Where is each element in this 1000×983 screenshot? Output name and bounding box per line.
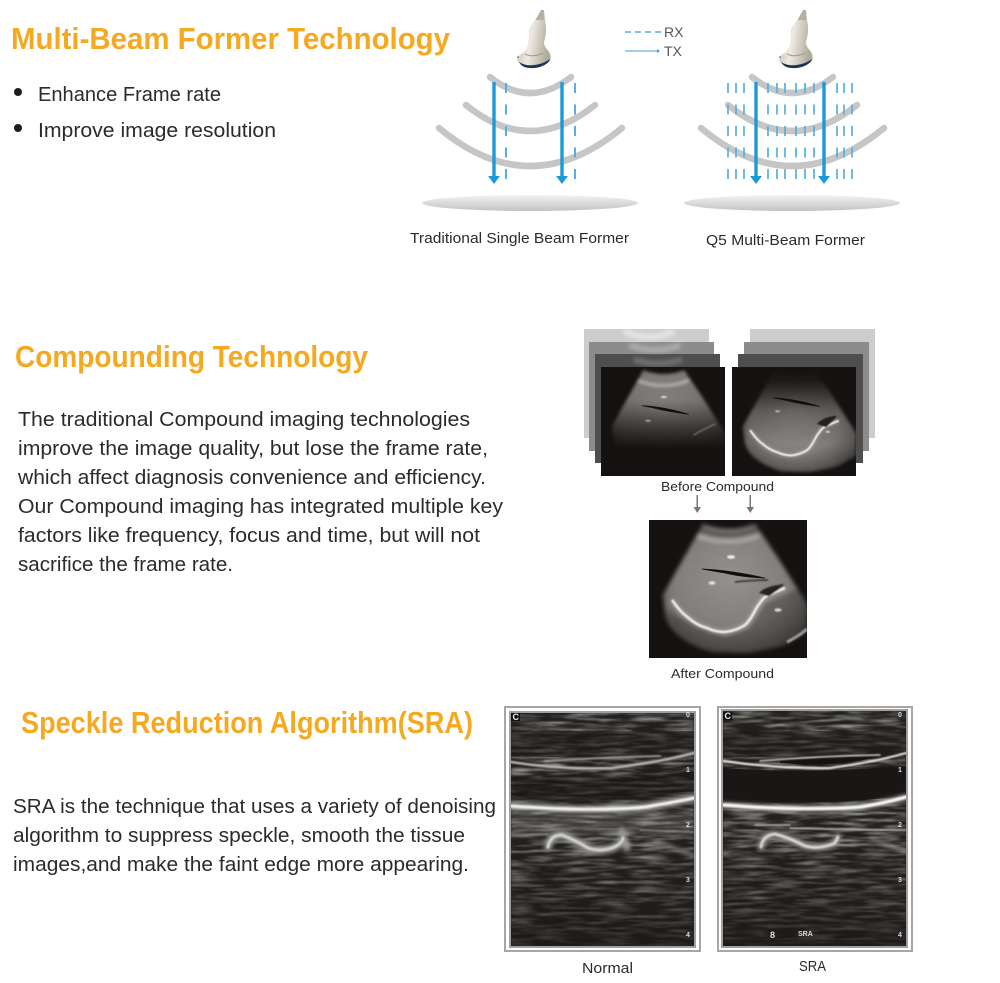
- scan markers: SRA: [798, 931, 813, 938]
- darker tissue below diaphragm: [664, 589, 807, 653]
- image: after compound: [649, 520, 811, 660]
- text block: SRA description: images,and make the faint edge more appearing.: [13, 854, 469, 876]
- bullet list: multi-beam benefits: [14, 84, 276, 142]
- caption: before compound: Before Compound: [661, 479, 774, 494]
- gray wave arcs: [701, 77, 884, 166]
- panel: normal ultrasound image: [505, 707, 700, 951]
- panel: SRA ultrasound image: [718, 707, 912, 951]
- scan markers: [511, 712, 690, 939]
- arrows: before to after: [694, 495, 754, 513]
- TX arrows: [750, 82, 830, 184]
- caption: after compound: After Compound: [671, 666, 774, 681]
- legend: RX and TX: RX: [664, 24, 684, 40]
- text block: compounding description: sacrifice the frame rate.: [18, 554, 233, 576]
- scan markers: C: [512, 712, 520, 722]
- scan markers: 0: [898, 712, 902, 719]
- title: Multi-Beam Former Technology: Multi-Beam Former Technology: [11, 21, 451, 56]
- liver vessel: [702, 569, 765, 578]
- gray wave arcs: [439, 77, 622, 166]
- diaphragm glow and highlight: [672, 588, 785, 632]
- scan markers: 8: [770, 930, 775, 940]
- image stack: before compound, right: [732, 329, 875, 476]
- diagram: traditional single beam former: [422, 10, 638, 211]
- image stack: before compound, left: [584, 329, 725, 476]
- TX arrows: [488, 82, 568, 184]
- heading: Speckle Reduction Algorithm(SRA): Speckle Reduction Algorithm(SRA): [21, 705, 473, 740]
- scan markers: 1: [686, 767, 690, 774]
- caption: SRA: SRA: [799, 958, 826, 975]
- icon: ultrasound probe: [779, 10, 813, 68]
- scan markers: 4: [898, 932, 902, 939]
- scan markers: 1: [898, 767, 902, 774]
- RX dashed beams, many: [728, 83, 852, 179]
- text block: SRA description: SRA is the technique that uses a variety of denoising: [13, 796, 496, 818]
- scan markers: [723, 711, 902, 940]
- scan markers: C: [724, 711, 732, 721]
- text block: SRA description: [13, 796, 496, 876]
- text block: compounding description: The traditional Compound imaging technologies: [18, 409, 470, 431]
- text block: compounding description: which affect diagnosis convenience and efficiency.: [17, 467, 486, 489]
- legend: RX and TX: TX: [664, 43, 683, 59]
- scan markers: 4: [686, 932, 690, 939]
- ground ellipse: [422, 195, 638, 211]
- caption: traditional single beam former: Traditional Single Beam Former: [410, 231, 629, 247]
- caption: Q5 multi-beam former: Q5 Multi-Beam Former: [706, 233, 865, 249]
- heading: Compounding Technology: Compounding Technology: [15, 339, 369, 374]
- bullet list: multi-beam benefits: Enhance Frame rate: [38, 84, 221, 106]
- scan markers: 0: [686, 712, 690, 719]
- bullet list: multi-beam benefits: Improve image resolution: [38, 120, 276, 142]
- icon: ultrasound probe: [517, 10, 551, 68]
- diagram: Q5 multi-beam former: [684, 10, 900, 211]
- scan markers: 2: [686, 822, 690, 829]
- text block: SRA description: algorithm to suppress speckle, smooth the tissue: [13, 825, 465, 847]
- legend: RX and TX: [625, 24, 684, 59]
- text block: compounding description: [17, 409, 503, 576]
- ground ellipse: [684, 195, 900, 211]
- scan markers: 3: [686, 877, 690, 884]
- scan markers: 2: [898, 822, 902, 829]
- text block: compounding description: factors like frequency, focus and time, but will not: [18, 525, 480, 547]
- text block: compounding description: improve the image quality, but lose the frame rate,: [18, 438, 488, 460]
- RX dashed beams: [506, 83, 575, 179]
- scan markers: 3: [898, 877, 902, 884]
- text block: compounding description: Our Compound imaging has integrated multiple key: [18, 496, 503, 518]
- caption: normal: Normal: [582, 960, 633, 977]
